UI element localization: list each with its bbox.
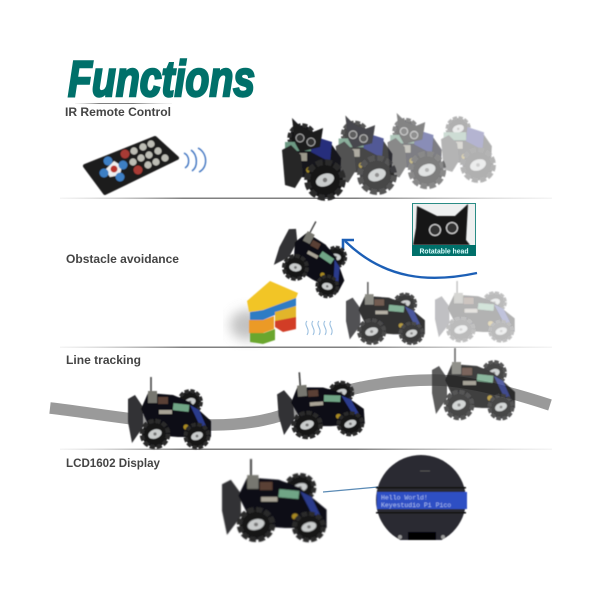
robot cars: line tracking	[128, 348, 515, 448]
icon: infrared remote	[85, 138, 177, 193]
inset: rotatable head	[412, 204, 476, 256]
heading: Obstacle avoidance: Obstacle avoidance	[66, 252, 179, 266]
robot cars: obstacle avoidance	[269, 212, 515, 343]
LCD close-up	[376, 455, 467, 545]
heading: IR Remote Control: IR Remote Control	[65, 105, 171, 119]
LCD close-up: Hello World!	[381, 494, 428, 502]
title: Functions	[68, 51, 255, 107]
tracking line	[50, 380, 550, 425]
arrow: avoidance path	[343, 240, 477, 278]
icon: building block house	[230, 281, 298, 344]
icon: ultrasonic waves	[306, 321, 332, 335]
heading: Line tracking: Line tracking	[66, 353, 141, 367]
icon: infrared signal waves	[184, 148, 206, 172]
inset: rotatable head: Rotatable head	[420, 248, 468, 256]
robot car: LCD display	[222, 459, 327, 540]
callout line to LCD	[323, 487, 378, 492]
robot cars: IR remote motion sequence	[282, 113, 493, 198]
heading: LCD1602 Display: LCD1602 Display	[66, 456, 160, 470]
LCD close-up: Keyestudio Pi Pico	[381, 502, 451, 509]
